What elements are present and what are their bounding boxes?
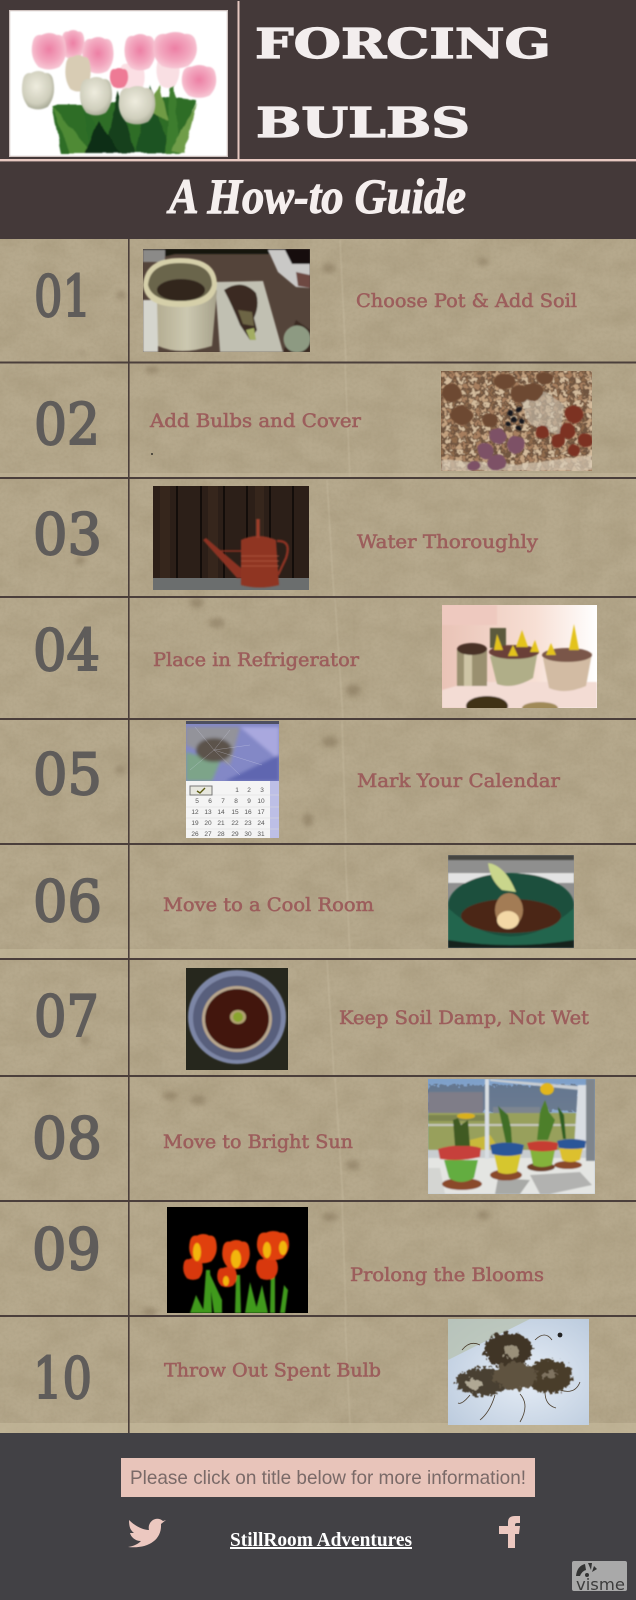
subtitle: A How-to Guide <box>166 168 466 224</box>
photo: calendar: 9 <box>247 798 251 805</box>
header photo: tulips <box>9 10 228 157</box>
step 03 <box>33 486 539 590</box>
label: Throw Out Spent Bulb: Throw Out Spent Bulb <box>164 1360 381 1382</box>
label: Water Thoroughly: Water Thoroughly <box>357 532 539 553</box>
photo: red and yellow tulips <box>167 1207 308 1313</box>
number 01: 01 <box>34 264 91 330</box>
icon: facebook f <box>499 1516 520 1548</box>
callout <box>121 1458 535 1497</box>
photo: calendar: 13 <box>204 809 212 816</box>
step 04 <box>33 605 597 716</box>
label: Move to Bright Sun: Move to Bright Sun <box>163 1132 353 1153</box>
photo: calendar: 27 <box>204 831 212 838</box>
photo: assorted bulbs <box>441 371 592 471</box>
photo: calendar: 6 <box>208 798 212 805</box>
step divider lines <box>0 239 636 1433</box>
label: Place in Refrigerator: Place in Refrigerator <box>153 650 359 671</box>
number 03: 03 <box>33 502 102 568</box>
photo: painted pots in sunny window <box>428 1079 595 1194</box>
photo: calendar: 22 <box>231 820 239 827</box>
photo: calendar: 21 <box>217 820 225 827</box>
photo: calendar: 26 <box>191 831 199 838</box>
step 07 <box>34 968 590 1070</box>
photo: calendar: 10 <box>257 798 265 805</box>
header vertical divider <box>238 1 240 159</box>
number 05: 05 <box>33 742 102 808</box>
photo: calendar: 24 <box>257 820 265 827</box>
callout: Please click on title below for more information! <box>130 1467 526 1489</box>
photo: calendar: 1 <box>235 787 239 794</box>
photo: calendar: 17 <box>257 809 265 816</box>
label: Prolong the Blooms: Prolong the Blooms <box>350 1265 544 1286</box>
photo: calendar: 8 <box>234 798 238 805</box>
photo: calendar: 20 <box>204 820 212 827</box>
photo: calendar: 5 <box>195 798 199 805</box>
photo: calendar: 31 <box>257 831 265 838</box>
title: FORCING <box>255 20 551 68</box>
number 06: 06 <box>33 869 102 935</box>
link: StillRoom Adventures: StillRoom Adventures <box>230 1529 412 1551</box>
number 04: 04 <box>33 618 100 684</box>
label: Mark Your Calendar: Mark Your Calendar <box>357 771 560 792</box>
title <box>255 20 551 147</box>
step 09 <box>32 1207 544 1313</box>
photo: watering can <box>153 486 309 590</box>
label: Move to a Cool Room: Move to a Cool Room <box>163 895 374 916</box>
header background <box>0 0 636 240</box>
header horizontal divider <box>0 159 636 161</box>
label: Add Bulbs and Cover: Add Bulbs and Cover <box>149 411 361 432</box>
photo: spent bulbs with roots <box>448 1319 589 1425</box>
photo: calendar: 29 <box>231 831 239 838</box>
photo: calendar: 7 <box>221 798 225 805</box>
step 08 <box>32 1079 595 1194</box>
photo: calendar: 15 <box>231 809 239 816</box>
footer background <box>0 1433 636 1600</box>
step 01 <box>34 249 577 352</box>
step 05 <box>33 721 560 838</box>
visme badge <box>572 1561 627 1594</box>
photo: calendar: 30 <box>244 831 252 838</box>
number 08: 08 <box>32 1106 102 1172</box>
title: BULBS <box>256 99 470 147</box>
photo: pot and bulb <box>143 249 310 352</box>
step 02 <box>34 366 597 476</box>
photo: calendar: 28 <box>217 831 225 838</box>
photo: pots in refrigerator <box>442 605 597 708</box>
visme badge: visme <box>576 1575 625 1594</box>
step 06 <box>33 855 574 948</box>
photo: calendar: 2 <box>247 787 251 794</box>
photo: calendar: 23 <box>244 820 252 827</box>
photo: sprouting bulb in green pot <box>448 855 574 948</box>
photo: pot on saucer from above <box>186 968 288 1070</box>
number 10: 10 <box>33 1346 92 1412</box>
number 07: 07 <box>34 984 99 1050</box>
photo: calendar: 16 <box>244 809 252 816</box>
step 10 <box>33 1319 589 1425</box>
photo: calendar <box>186 721 279 838</box>
label: Choose Pot & Add Soil: Choose Pot & Add Soil <box>356 291 577 312</box>
photo: calendar: 12 <box>191 809 199 816</box>
icon: twitter bird <box>128 1519 166 1547</box>
number 02: 02 <box>34 392 100 458</box>
photo: calendar: 3 <box>260 787 264 794</box>
photo: calendar: 14 <box>217 809 225 816</box>
number 09: 09 <box>32 1217 101 1283</box>
paper background <box>0 239 636 1433</box>
label: Keep Soil Damp, Not Wet: Keep Soil Damp, Not Wet <box>339 1008 590 1029</box>
photo: calendar: 19 <box>191 820 199 827</box>
